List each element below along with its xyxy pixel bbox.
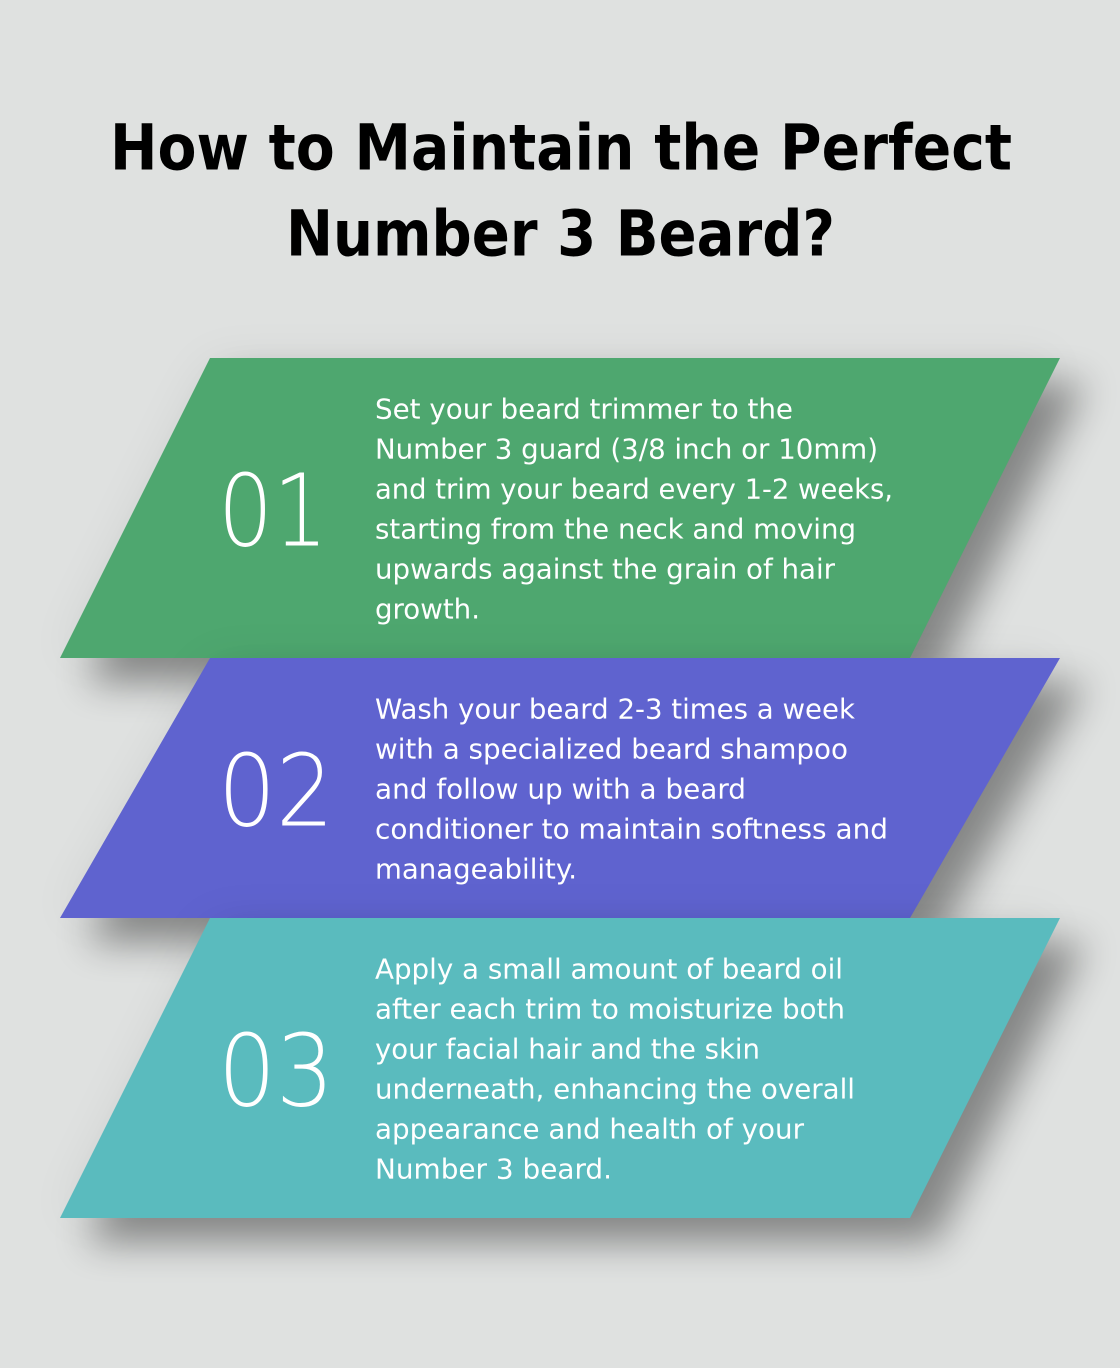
title: How to Maintain the Perfect <box>110 112 1012 184</box>
title: Number 3 Beard? <box>286 198 835 270</box>
text: step 01 description <box>375 392 893 626</box>
text: step 03 description <box>375 952 855 1186</box>
text: step 03 description: Apply a small amount of beard oil <box>375 952 843 986</box>
text: step 02 description: with a specialized beard shampoo <box>375 732 848 766</box>
title <box>110 112 1012 270</box>
text: step 02 description: and follow up with a beard <box>375 772 746 806</box>
text: step 03 description: underneath, enhancing the overall <box>375 1072 855 1106</box>
text: step 02 description: Wash your beard 2-3 times a week <box>375 692 856 726</box>
text: step 03 description: Number 3 beard. <box>375 1152 612 1186</box>
text: step 02 description: conditioner to maintain softness and <box>375 812 888 846</box>
text: step 01 description: upwards against the grain of hair <box>375 552 835 586</box>
text: step 01 description: Number 3 guard (3/8 inch or 10mm) <box>375 432 878 466</box>
panel: step 01 <box>60 358 1086 683</box>
number 03: 03 <box>218 1012 334 1130</box>
text: step 03 description: after each trim to moisturize both <box>375 992 845 1026</box>
text: step 03 description: your facial hair and the skin <box>375 1032 760 1066</box>
text: step 02 description: manageability. <box>375 852 577 886</box>
text: step 01 description: Set your beard trimmer to the <box>375 392 793 426</box>
text: step 01 description: and trim your beard every 1-2 weeks, <box>375 472 893 506</box>
number 01: 01 <box>218 452 328 570</box>
panel: step 02 <box>60 658 1086 943</box>
number 02: 02 <box>218 732 334 850</box>
text: step 03 description: appearance and health of your <box>375 1112 804 1146</box>
panel: step 03 <box>60 918 1086 1243</box>
text: step 02 description <box>375 692 888 886</box>
text: step 01 description: starting from the neck and moving <box>375 512 856 546</box>
text: step 01 description: growth. <box>375 592 480 626</box>
